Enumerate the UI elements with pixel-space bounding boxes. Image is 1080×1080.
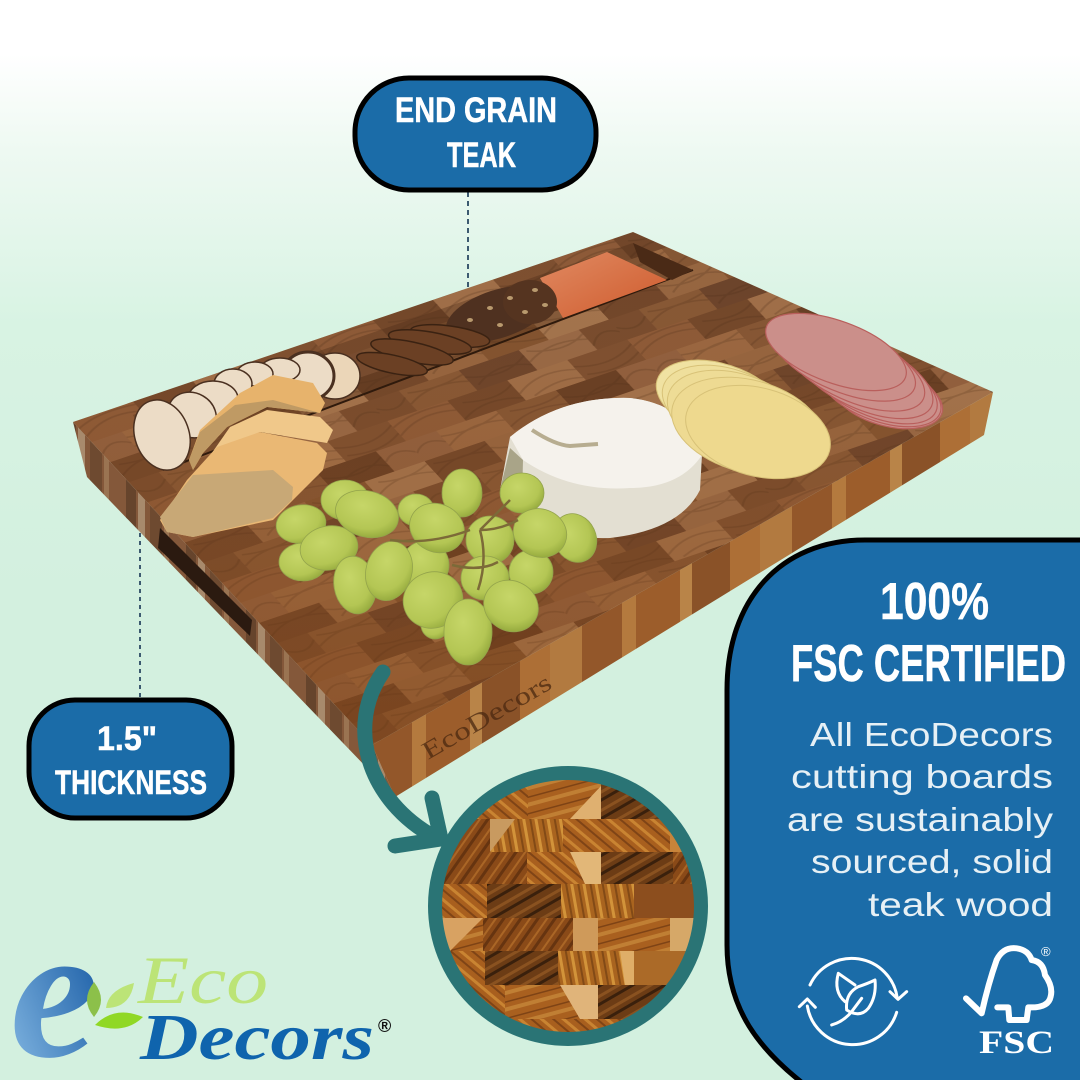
food: baguette — [160, 375, 333, 537]
wood close-up circle — [435, 773, 704, 1039]
callout: end grain teak: END GRAIN — [395, 91, 557, 130]
cutting board photo — [73, 232, 993, 797]
callout: thickness — [29, 700, 232, 818]
logo leaves — [87, 982, 143, 1029]
FSC information panel — [727, 540, 1080, 1080]
board: left side face — [73, 422, 395, 797]
panel body text: All EcoDecors — [810, 716, 1053, 753]
board: top face — [73, 232, 993, 745]
dotted line: end grain callout — [467, 192, 469, 384]
callout: end grain teak: TEAK — [447, 136, 516, 175]
grape stems — [390, 500, 518, 590]
EcoDecors logo: Decors — [139, 1001, 374, 1074]
dotted line: thickness callout — [139, 533, 141, 697]
panel body text: cutting boards — [791, 758, 1053, 795]
food: green grapes — [273, 469, 605, 665]
panel body text: teak wood — [868, 886, 1053, 923]
panel body text: sourced, solid — [811, 843, 1053, 880]
food: cookies — [124, 352, 360, 478]
panel heading: 100% — [880, 573, 989, 631]
food: brie cheese — [500, 398, 702, 538]
icon: recycling leaf — [799, 958, 907, 1045]
callout: end grain teak — [355, 78, 596, 190]
icon: FSC logo — [966, 944, 1054, 1061]
food: seeded crackers — [355, 274, 557, 380]
end grain tiles — [440, 780, 704, 1039]
callout: thickness: THICKNESS — [55, 764, 207, 802]
engraved brand on board: EcoDecors — [418, 669, 557, 765]
icon: FSC logo: FSC — [979, 1025, 1054, 1061]
board: front side face — [372, 392, 993, 797]
EcoDecors logo — [10, 888, 391, 1080]
food: sliced yellow cheese — [646, 345, 841, 494]
panel body text — [787, 716, 1054, 923]
handle slot — [158, 528, 252, 636]
panel body text: are sustainably — [787, 801, 1054, 838]
food: salmon — [540, 252, 667, 318]
arrow to wood close-up — [365, 672, 441, 846]
food channel — [133, 243, 693, 470]
logo wordmark: Eco — [137, 942, 268, 1018]
callout: thickness: 1.5" — [97, 720, 157, 758]
food: salami slices — [756, 298, 950, 441]
icon: FSC logo: ® — [1041, 944, 1051, 959]
EcoDecors logo: ® — [378, 1016, 391, 1036]
